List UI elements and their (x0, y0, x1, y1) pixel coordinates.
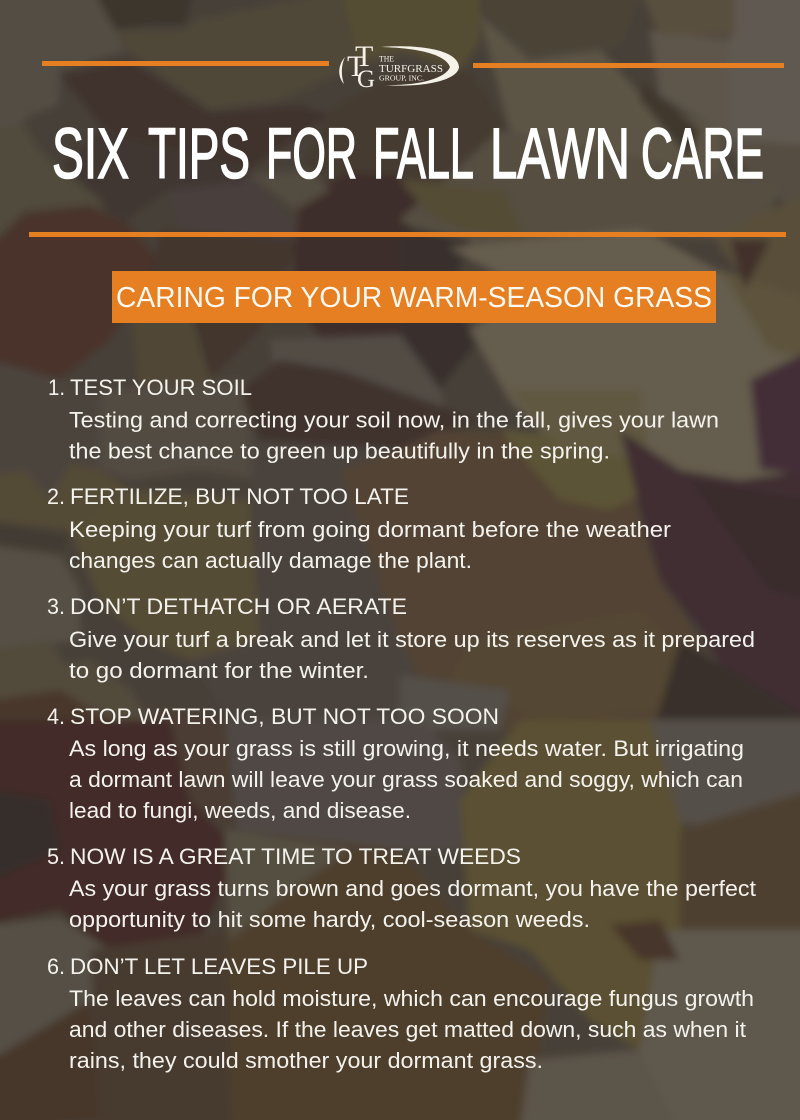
top left orange rule (42, 61, 329, 66)
tip 6: DON’T LET LEAVES PILE UP (70, 954, 368, 979)
logo: The Turfgrass Group, Inc.: TURFGRASS (379, 63, 443, 75)
tip 4 (47, 704, 744, 823)
logo: The Turfgrass Group, Inc. (339, 40, 459, 93)
tip 2 (47, 484, 672, 573)
tip 6: and other diseases. If the leaves get matted down, such as when it (69, 1017, 747, 1042)
tip 4: As long as your grass is still growing, it needs water. But irrigating (69, 736, 744, 761)
title: SIX (52, 115, 129, 194)
tip 5 (47, 844, 757, 932)
tip 6: The leaves can hold moisture, which can encourage fungus growth (69, 986, 754, 1011)
title (52, 115, 764, 194)
tip 1: the best chance to green up beautifully in the spring. (69, 438, 610, 464)
tip 4: a dormant lawn will leave your grass soaked and soggy, which can (69, 767, 743, 792)
logo: The Turfgrass Group, Inc.: GROUP, INC. (379, 74, 424, 82)
tip 4: lead to fungi, weeds, and disease. (69, 798, 411, 823)
tip 3: to go dormant for the winter. (69, 658, 369, 683)
tip 6: rains, they could smother your dormant grass. (69, 1048, 543, 1073)
logo: The Turfgrass Group, Inc.: G (357, 66, 375, 93)
tip 1: Testing and correcting your soil now, in the fall, gives your lawn (69, 408, 719, 432)
tip 1 (48, 375, 719, 464)
tip 1: TEST YOUR SOIL (70, 375, 252, 400)
title: FALL (373, 115, 474, 194)
divider rule under title (29, 232, 786, 237)
tip 3 (47, 594, 755, 683)
title: TIPS (148, 115, 250, 194)
tip 5: NOW IS A GREAT TIME TO TREAT WEEDS (70, 844, 521, 869)
section banner: CARING FOR YOUR WARM-SEASON GRASS (116, 282, 712, 314)
title: LAWN (490, 115, 630, 194)
logo: The Turfgrass Group, Inc.: THE (379, 54, 394, 64)
tip 5: opportunity to hit some hardy, cool-season weeds. (69, 907, 590, 932)
tip 4: STOP WATERING, BUT NOT TOO SOON (70, 704, 499, 729)
tip 2: 2. (47, 484, 65, 509)
title: FOR (266, 115, 357, 194)
tip 1: 1. (48, 375, 65, 400)
tip 5: 5. (47, 844, 65, 869)
logo: The Turfgrass Group, Inc.: T (355, 40, 373, 73)
tip 3: 3. (47, 594, 65, 619)
top right orange rule (473, 63, 784, 68)
tip 2: Keeping your turf from going dormant before the weather (69, 517, 672, 542)
tip 4: 4. (47, 704, 65, 729)
tip 5: As your grass turns brown and goes dormant, you have the perfect (69, 876, 757, 901)
tip 3: Give your turf a break and let it store up its reserves as it prepared (69, 627, 755, 652)
logo: The Turfgrass Group, Inc.: T (347, 50, 365, 83)
section banner (112, 271, 716, 323)
tip 2: changes can actually damage the plant. (69, 548, 472, 573)
tip 3: DON’T DETHATCH OR AERATE (70, 594, 407, 619)
tip 6: 6. (47, 954, 65, 979)
tip 6 (47, 954, 754, 1073)
tip 2: FERTILIZE, BUT NOT TOO LATE (70, 484, 409, 509)
